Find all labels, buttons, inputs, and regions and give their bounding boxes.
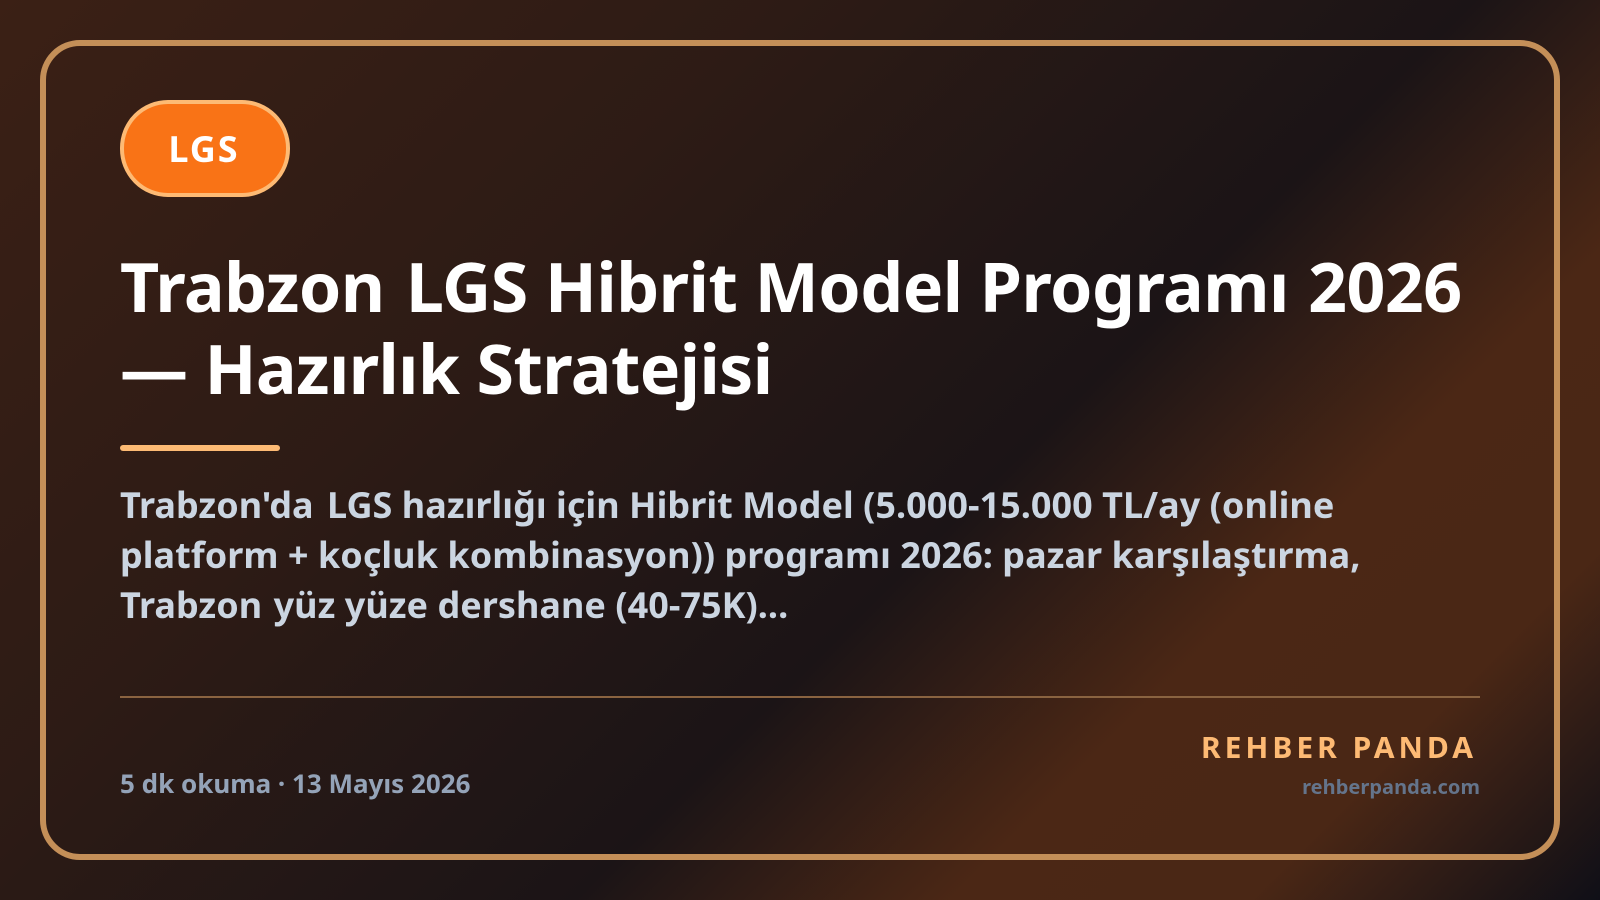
footer divider <box>120 696 1480 698</box>
description text <box>120 480 1361 629</box>
reading time and date: 5 dk okuma · 13 Mayıs 2026 <box>120 765 470 801</box>
title <box>120 239 1462 414</box>
accent underline <box>120 445 280 451</box>
description text: Trabzon'da LGS hazırlığı için Hibrit Model (5.000-15.000 TL/ay (online <box>120 480 1334 529</box>
badge: LGS <box>120 100 290 197</box>
brand URL: rehberpanda.com <box>1302 773 1480 800</box>
brand name: REHBER PANDA <box>1201 726 1477 767</box>
description text: Trabzon yüz yüze dershane (40-75K)... <box>120 580 788 629</box>
title: Trabzon LGS Hibrit Model Programı 2026 <box>120 239 1462 332</box>
title: — Hazırlık Stratejisi <box>120 321 772 414</box>
badge: LGS: LGS <box>168 124 240 173</box>
description text: platform + koçluk kombinasyon)) programı 2026: pazar karşılaştırma, <box>120 530 1361 579</box>
